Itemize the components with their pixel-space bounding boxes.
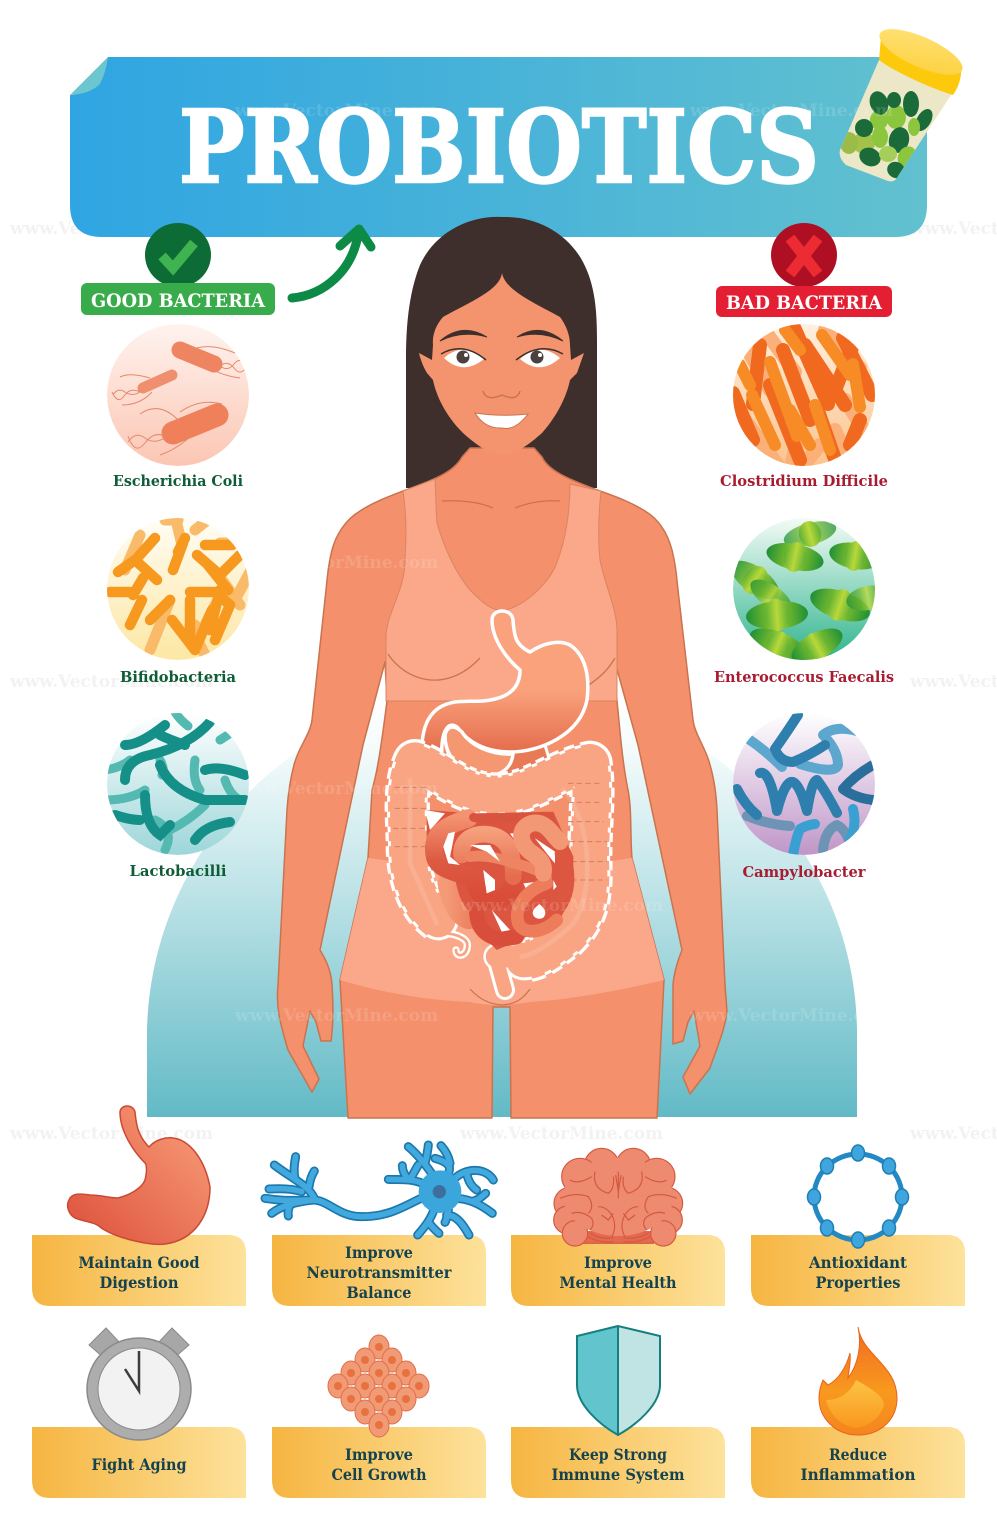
overlay watermark text: www.VectorMine.com — [234, 1461, 438, 1481]
card: Improve Neurotransmitter Balance: Improve — [345, 1243, 413, 1262]
bad bacteria badge — [716, 223, 892, 317]
card: Keep Strong Immune System: Immune System — [552, 1465, 685, 1484]
pancreas — [445, 727, 513, 775]
card: Improve Cell Growth: Cell Growth — [332, 1465, 427, 1484]
card: Improve Neurotransmitter Balance — [272, 1235, 486, 1306]
card: Improve Mental Health: Mental Health — [560, 1273, 677, 1292]
panel: Escherichia Coli: Escherichia Coli — [113, 472, 243, 490]
panel: Enterococcus Faecalis: Enterococcus Faecalis — [714, 668, 894, 686]
bad bacteria badge: BAD BACTERIA — [726, 292, 882, 314]
card: Improve Mental Health: Improve — [584, 1253, 652, 1272]
card: Improve Cell Growth: Improve — [345, 1445, 413, 1464]
colon — [393, 762, 607, 990]
panel: Clostridium Difficile — [720, 324, 888, 490]
overlay watermark text: www.VectorMine.com — [234, 1233, 438, 1253]
background watermark text: www.VectorMine.com — [459, 1124, 663, 1144]
arrow — [292, 229, 371, 298]
bra — [386, 479, 617, 701]
bust and collarbone lines — [388, 501, 615, 688]
icon: flame — [819, 1327, 897, 1435]
good bacteria badge — [81, 223, 275, 315]
card: Maintain Good Digestion: Maintain Good — [78, 1253, 200, 1272]
card: Antioxidant Properties: Properties — [816, 1273, 900, 1292]
card: Maintain Good Digestion — [32, 1235, 246, 1306]
card: Improve Cell Growth — [272, 1427, 486, 1498]
background watermark text: www.VectorMine.com — [9, 219, 213, 239]
overlay watermark text — [234, 101, 893, 1481]
intestines — [393, 762, 607, 990]
overlay watermark text: www.VectorMine.com — [234, 553, 438, 573]
woman figure — [277, 217, 727, 1118]
card: Antioxidant Properties — [751, 1235, 965, 1306]
good bacteria badge: GOOD BACTERIA — [91, 290, 265, 312]
card: Reduce Inflammation: Reduce — [829, 1445, 887, 1464]
card: Keep Strong Immune System: Keep Strong — [569, 1445, 667, 1464]
overlay watermark text: www.VectorMine.com — [689, 101, 893, 121]
panel: Enterococcus Faecalis — [714, 514, 894, 686]
background watermark text: www.VectorMine.com — [9, 1124, 213, 1144]
stomach — [422, 611, 588, 760]
crotch line — [470, 989, 530, 1005]
nose — [483, 391, 520, 398]
face — [419, 273, 584, 454]
title: PROBIOTICS — [179, 88, 819, 206]
card: Fight Aging: Fight Aging — [92, 1455, 186, 1474]
icon: neuron — [265, 1145, 493, 1235]
overlay watermark text: www.VectorMine.com — [234, 1006, 438, 1026]
panel: Campylobacter — [733, 713, 875, 881]
icon: antioxidant ring — [808, 1145, 908, 1248]
icon: cells — [328, 1335, 429, 1437]
background watermark text — [9, 219, 997, 1144]
icon: brain — [554, 1148, 683, 1246]
icon: stomach — [68, 1106, 210, 1244]
card: Improve Neurotransmitter Balance: Neurotransmitter — [306, 1263, 452, 1282]
card: Maintain Good Digestion: Digestion — [100, 1273, 179, 1292]
digestive system — [393, 611, 607, 990]
overlay watermark text: www.VectorMine.com — [234, 101, 438, 121]
shorts — [340, 858, 664, 1005]
card: Antioxidant Properties: Antioxidant — [808, 1253, 908, 1272]
panel: Escherichia Coli — [107, 324, 249, 490]
card: Reduce Inflammation: Inflammation — [800, 1465, 916, 1484]
smile — [475, 413, 528, 428]
panel: Bifidobacteria: Bifidobacteria — [120, 668, 236, 686]
overlay watermark text: www.VectorMine.com — [689, 1233, 893, 1253]
overlay watermark text: www.VectorMine.com — [234, 779, 438, 799]
background watermark text: www.VectorMine.com — [459, 219, 663, 239]
small intestine — [425, 810, 573, 950]
body silhouette — [277, 448, 727, 1118]
card: Reduce Inflammation — [751, 1427, 965, 1498]
panel: Campylobacter: Campylobacter — [742, 863, 867, 881]
card: Improve Neurotransmitter Balance: Balance — [346, 1283, 412, 1302]
overlay watermark text: www.VectorMine.com — [459, 896, 663, 916]
background watermark text: www.VectorMine.com — [9, 672, 213, 692]
panel: Lactobacilli — [105, 712, 249, 880]
icon: stopwatch — [87, 1328, 191, 1440]
panel: Clostridium Difficile: Clostridium Difficile — [720, 472, 888, 490]
card: Fight Aging — [32, 1427, 246, 1498]
hair — [406, 217, 597, 488]
icon: pill jar — [840, 20, 968, 181]
overlay watermark text: www.VectorMine.com — [689, 1006, 893, 1026]
icon: shield — [577, 1326, 660, 1435]
card: Keep Strong Immune System — [511, 1427, 725, 1498]
overlay watermark text: www.VectorMine.com — [689, 1461, 893, 1481]
card: Improve Mental Health — [511, 1235, 725, 1306]
eyes and brows — [440, 330, 563, 367]
panel: Bifidobacteria — [107, 518, 250, 686]
duodenum piece — [505, 745, 553, 782]
body background arch — [147, 685, 857, 1117]
banner — [70, 57, 927, 237]
panel: Lactobacilli: Lactobacilli — [130, 862, 227, 880]
